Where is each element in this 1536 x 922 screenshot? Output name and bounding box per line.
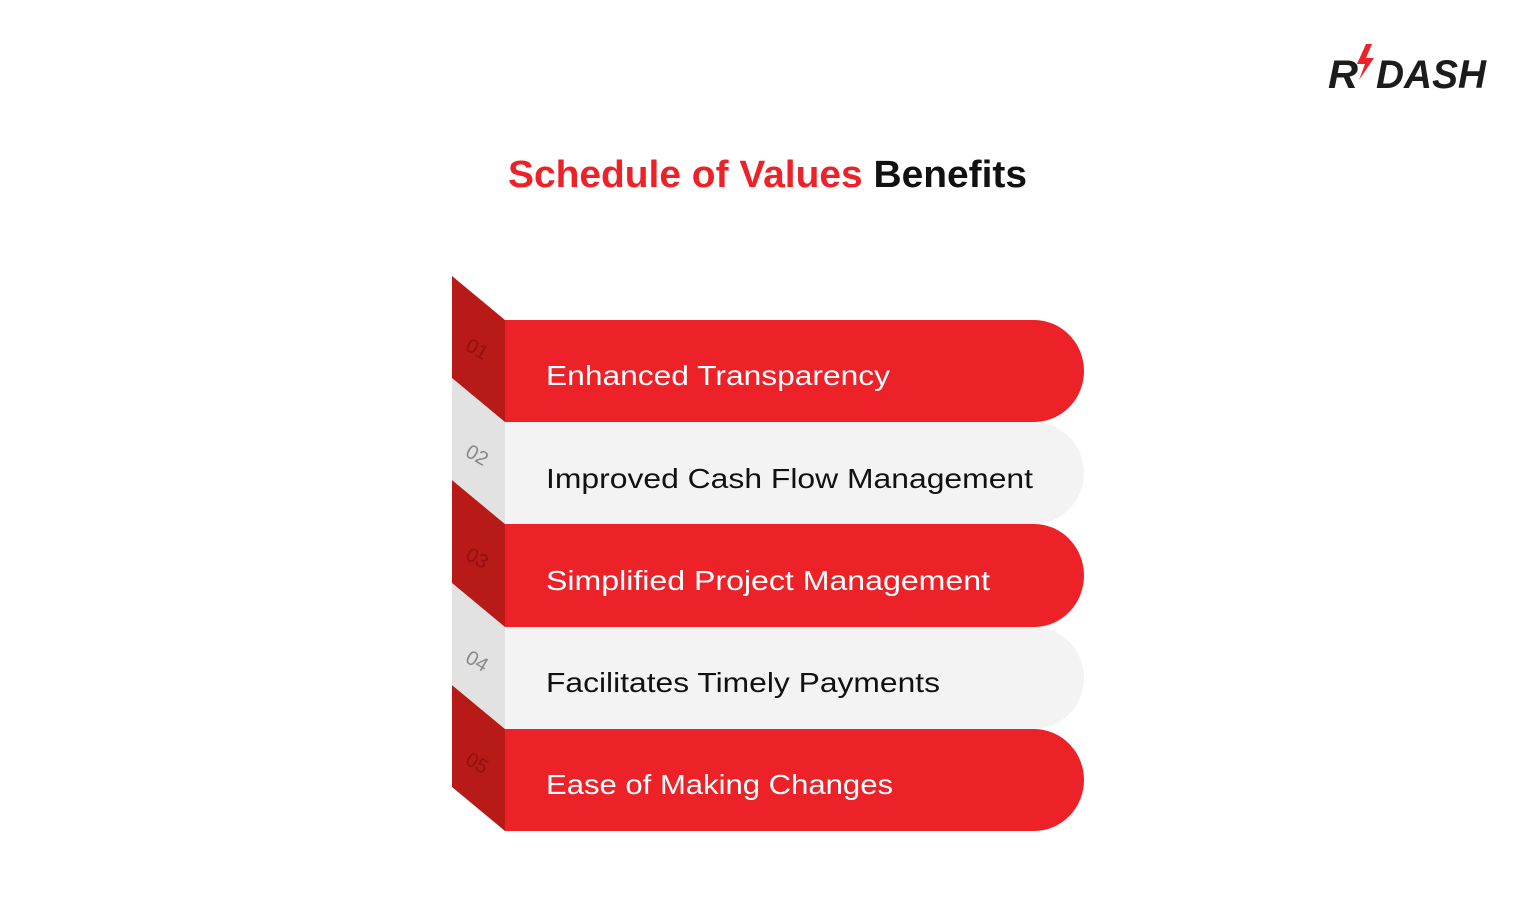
title: Schedule of Values Benefits <box>508 154 1027 196</box>
band 5 <box>452 685 1084 831</box>
band 3: Simplified Project Management <box>546 565 990 596</box>
band 2: 02 <box>462 441 492 471</box>
band 2 <box>452 378 1084 524</box>
band 5: 05 <box>462 749 492 779</box>
logo: DASH <box>1376 53 1487 97</box>
band 1: 01 <box>462 335 492 365</box>
band 1: Enhanced Transparency <box>546 360 890 391</box>
band 1 <box>452 276 1084 422</box>
logo: R <box>1328 53 1358 97</box>
band 3 <box>452 480 1084 627</box>
band 4 <box>452 583 1084 729</box>
band 4: Facilitates Timely Payments <box>546 667 940 698</box>
band 2: Improved Cash Flow Management <box>546 463 1033 494</box>
band 3: 03 <box>462 544 492 574</box>
logo <box>1328 44 1487 97</box>
band 4: 04 <box>462 647 492 677</box>
band 5: Ease of Making Changes <box>546 769 893 800</box>
